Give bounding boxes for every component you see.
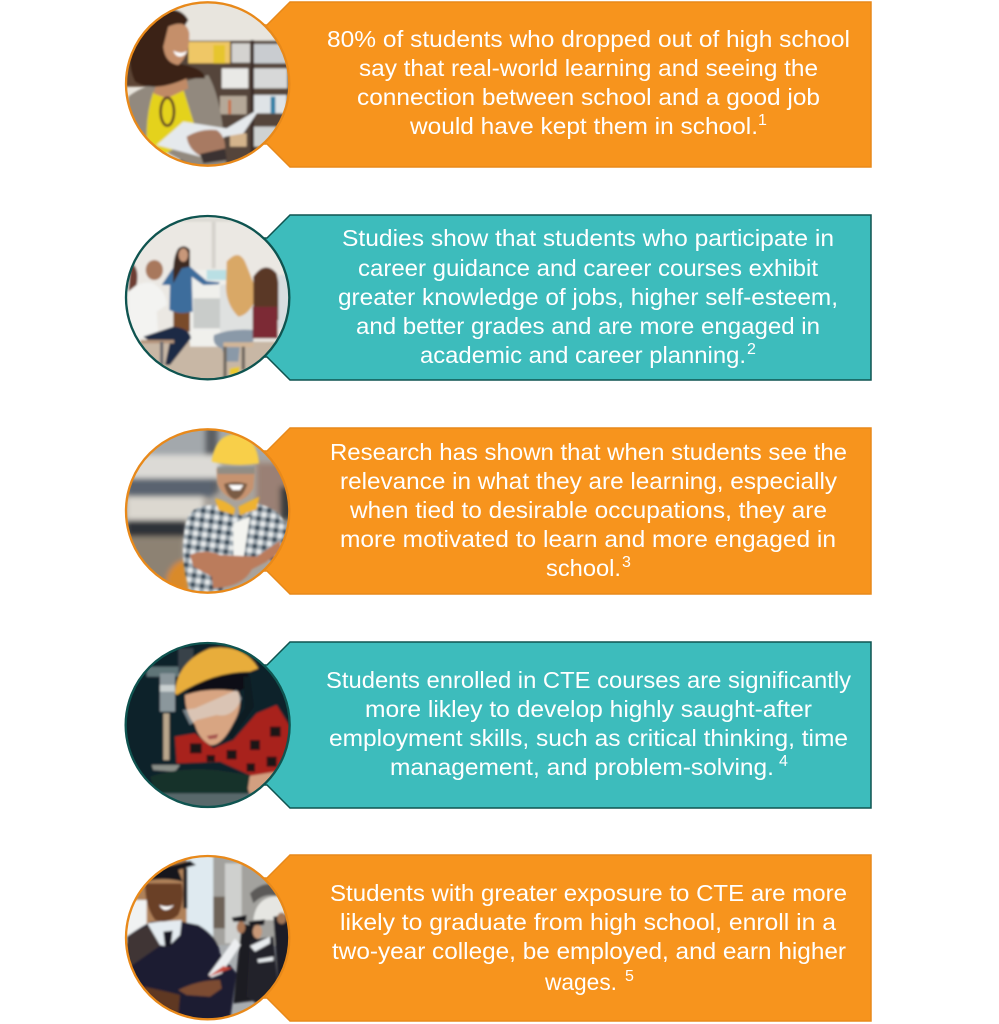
card 4: employment skills <box>123 640 871 810</box>
text block 1: 80% of students who dropped out of high school <box>327 26 850 52</box>
photo: student in hard hat at drill press <box>123 640 297 810</box>
photo: smiling construction worker with crossed arms <box>123 427 297 593</box>
text block 5: Students with greater exposure to CTE are more <box>330 880 847 906</box>
text block 4: 4 <box>779 753 788 770</box>
text block 2: academic and career planning. <box>420 342 746 368</box>
text block 3: school. <box>546 555 621 581</box>
text block 5: two-year college, be employed, and earn higher <box>332 938 846 964</box>
orange arrow panel 1 <box>250 2 871 167</box>
text block 2: greater knowledge of jobs, higher self-esteem, <box>338 284 838 310</box>
text block 4: employment skills, such as critical thinking, time <box>329 725 848 751</box>
text block 1 <box>327 26 850 139</box>
text block 5: likely to graduate from high school, enroll in a <box>340 909 836 935</box>
photo: teacher presenting to seated students <box>123 212 297 385</box>
text block 1: connection between school and a good job <box>357 84 820 110</box>
text block 3: more motivated to learn and more engaged in <box>340 526 836 552</box>
text block 3: 3 <box>622 554 631 571</box>
photo: smiling graduate with diploma <box>123 853 297 1020</box>
text block 2: and better grades and are more engaged in <box>356 313 820 339</box>
text block 4: more likley to develop highly saught-after <box>365 696 812 722</box>
card 5: graduation and wages <box>123 853 871 1021</box>
text block 1: would have kept them in school. <box>409 113 758 139</box>
card 1: real-world learning <box>123 0 871 170</box>
text block 2: 2 <box>747 341 756 358</box>
teal arrow panel 2 <box>250 215 871 380</box>
photo: student with open book <box>123 0 297 170</box>
text block 5 <box>330 880 847 995</box>
text block 1: say that real-world learning and seeing the <box>359 55 818 81</box>
text block 3 <box>330 439 847 581</box>
text block 2: career guidance and career courses exhibit <box>358 255 819 281</box>
text block 3: Research has shown that when students see the <box>330 439 847 465</box>
text block 4: management, and problem-solving. <box>390 754 774 780</box>
text block 5: 5 <box>625 968 634 985</box>
text block 4 <box>326 667 852 780</box>
orange arrow panel 3 <box>250 428 871 594</box>
teal arrow panel 4 <box>250 642 871 808</box>
text block 2 <box>338 225 838 368</box>
text block 5: wages. <box>544 969 617 995</box>
text block 4: Students enrolled in CTE courses are significantly <box>326 667 852 693</box>
card 2: career guidance <box>123 212 871 385</box>
card 3: relevance <box>123 427 871 594</box>
text block 2: Studies show that students who participate in <box>342 225 834 251</box>
text block 3: when tied to desirable occupations, they are <box>349 497 827 523</box>
orange arrow panel 5 <box>250 855 871 1021</box>
text block 3: relevance in what they are learning, especially <box>340 468 838 494</box>
text block 1: 1 <box>758 112 767 129</box>
